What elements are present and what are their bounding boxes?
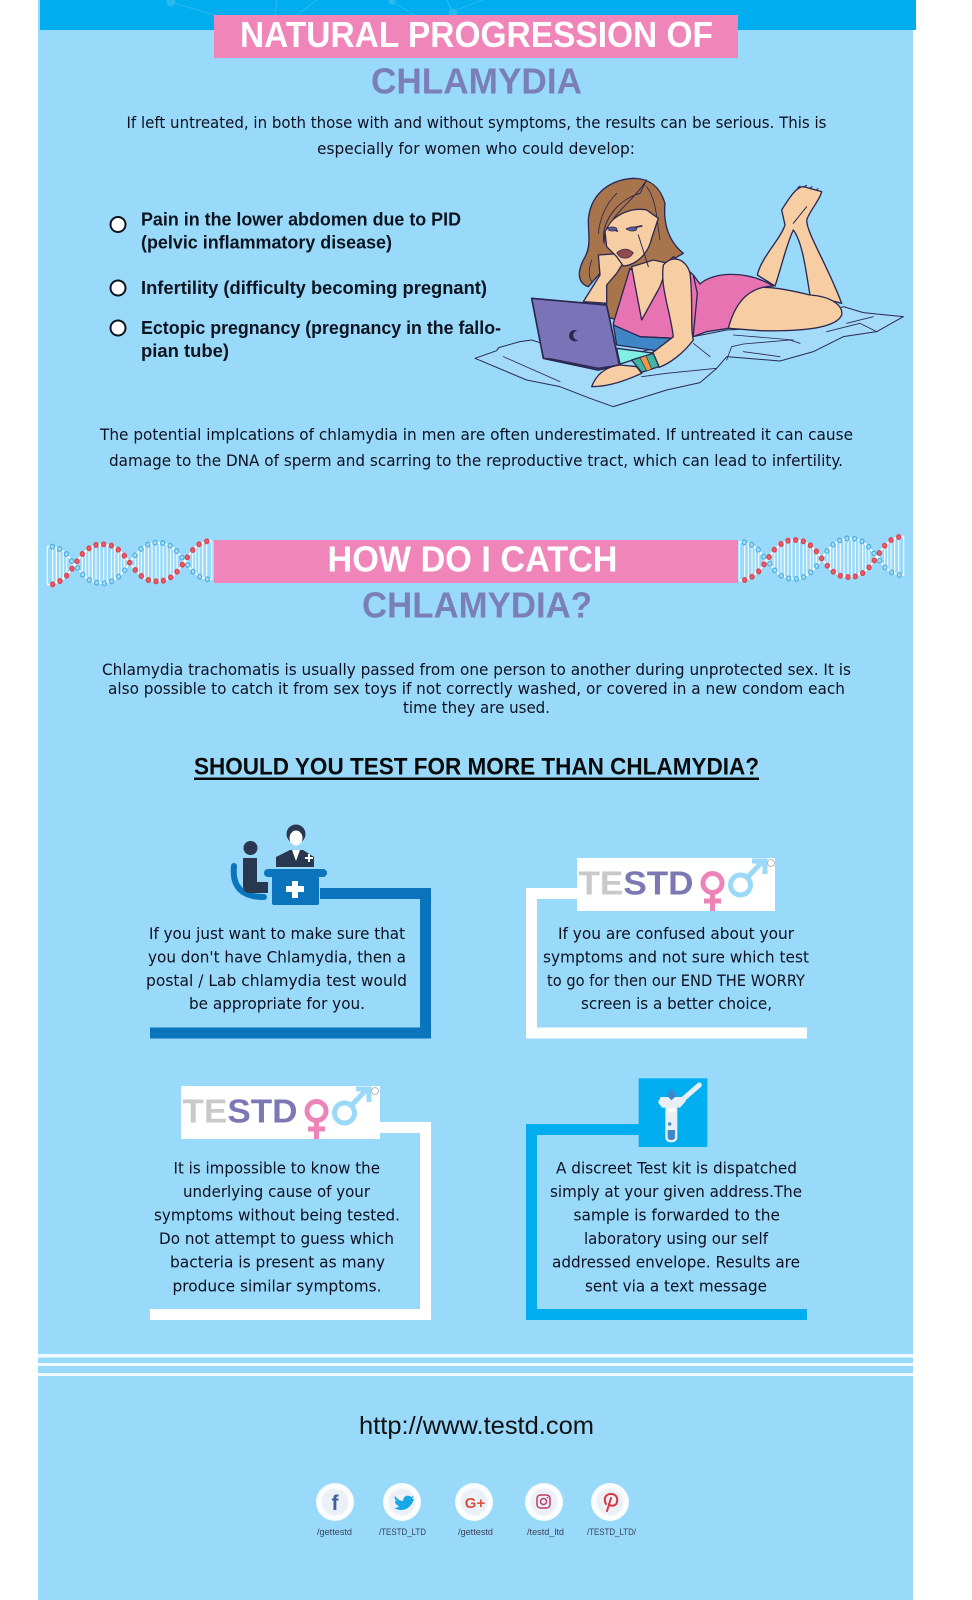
intro text: especially for women who could develop: [317, 139, 635, 158]
transmission paragraph [102, 660, 851, 717]
card: impossible to know: Do not attempt to guess which [159, 1229, 394, 1248]
transmission paragraph: time they are used. [403, 698, 550, 717]
intro text [126, 113, 826, 158]
card: discreet test kit: simply at your given address.The [550, 1182, 802, 1201]
icon: facebook: /gettestd [317, 1527, 352, 1538]
icon: instagram: /testd_ltd [527, 1527, 564, 1538]
icon: instagram [525, 1483, 564, 1538]
icon: pinterest [587, 1483, 636, 1538]
footer divider stripes [38, 1354, 913, 1376]
card: discreet test kit: laboratory using our self [584, 1229, 768, 1248]
icon: facebook: f [332, 1492, 340, 1515]
dna strand left [47, 539, 212, 587]
logo: testd [181, 1086, 380, 1139]
card: end the worry screen: screen is a better choice, [581, 994, 772, 1013]
icon: google plus: /gettestd [458, 1527, 493, 1538]
intro text: If left untreated, in both those with and without symptoms, the results can be serious. This is [126, 113, 826, 132]
men paragraph [99, 425, 853, 470]
men paragraph: damage to the DNA of sperm and scarring to the reproductive tract, which can lead to infertility. [109, 451, 843, 470]
card: impossible to know: It is impossible to know the [174, 1158, 380, 1178]
icon: google plus: G+ [465, 1495, 485, 1512]
heading: natural progression of chlamydia [214, 14, 738, 102]
illustration: woman using a laptop on a blanket [475, 178, 903, 407]
heading: natural progression of chlamydia: NATURAL PROGRESSION OF [240, 14, 713, 55]
transmission paragraph: Chlamydia trachomatis is usually passed from one person to another during unprotected sex. It is [102, 660, 851, 679]
symptom list: pian tube) [141, 341, 229, 361]
symptom list: Ectopic pregnancy (pregnancy in the fallo- [141, 318, 501, 338]
card: impossible to know: produce similar symptoms. [172, 1276, 382, 1296]
heading: how do i catch chlamydia [214, 538, 738, 626]
card: discreet test kit [532, 1078, 807, 1314]
heading: natural progression of chlamydia: CHLAMYDIA [371, 60, 582, 102]
card: postal / lab test: you don't have Chlamydia, then a [148, 948, 406, 966]
icon: twitter: /TESTD_LTD [379, 1527, 426, 1538]
icon: google plus [455, 1483, 493, 1538]
card: impossible to know: bacteria is present as many [170, 1252, 385, 1272]
heading: how do i catch chlamydia: CHLAMYDIA? [362, 584, 592, 626]
symptom list: Infertility (difficulty becoming pregnant) [141, 278, 487, 298]
heading: how do i catch chlamydia: HOW DO I CATCH [328, 538, 618, 580]
logo: testd: TESTD [182, 1093, 298, 1130]
icon: test tube [639, 1078, 707, 1147]
icon: doctor at desk [234, 824, 327, 905]
card: end the worry screen: If you are confused about your [558, 924, 794, 943]
card: discreet test kit: addressed envelope. Results are [552, 1252, 800, 1272]
card: discreet test kit: A discreet Test kit is dispatched [556, 1158, 797, 1178]
icon: pinterest: /TESTD_LTD/ [587, 1527, 636, 1538]
symptom list: (pelvic inflammatory disease) [141, 232, 392, 252]
card: end the worry screen: symptoms and not sure which test [543, 948, 809, 966]
transmission paragraph: also possible to catch it from sex toys if not correctly washed, or covered in a new condom each [108, 679, 845, 698]
card: postal / lab test: If you just want to make sure that [149, 924, 405, 943]
logo: testd [577, 858, 775, 911]
card: end the worry screen [532, 858, 809, 1033]
symptom list: Pain in the lower abdomen due to PID [141, 210, 461, 230]
card: impossible to know [150, 1086, 426, 1314]
icon: facebook [316, 1483, 354, 1538]
card: postal / lab test [146, 824, 426, 1033]
subheading: should you test: SHOULD YOU TEST FOR MORE THAN CHLAMYDIA? [194, 754, 759, 780]
dna strand right [739, 535, 904, 582]
card: discreet test kit: sample is forwarded to the [574, 1206, 780, 1224]
header bar [40, 0, 916, 30]
card: discreet test kit: sent via a text message [585, 1276, 767, 1296]
icon: twitter [379, 1483, 426, 1538]
card: impossible to know: underlying cause of your [183, 1182, 370, 1201]
symptom list [110, 210, 501, 361]
card: end the worry screen: to go for then our END THE WORRY [547, 971, 805, 990]
men paragraph: The potential implcations of chlamydia in men are often underestimated. If untreated it can cause [99, 425, 853, 444]
card: impossible to know: symptoms without being tested. [154, 1206, 400, 1224]
logo: testd: TESTD [578, 865, 694, 902]
card: postal / lab test: postal / Lab chlamydia test would [146, 971, 407, 990]
website url: http://www.testd.com [359, 1412, 594, 1440]
card: postal / lab test: be appropriate for you. [189, 994, 365, 1013]
social links [316, 1483, 636, 1538]
